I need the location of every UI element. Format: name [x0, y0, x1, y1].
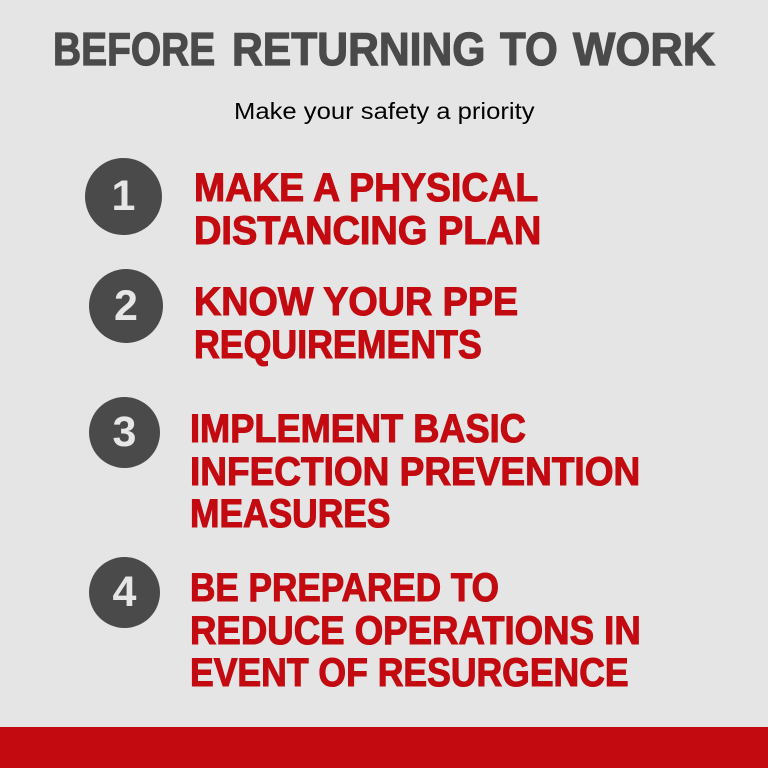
footer bar: [0, 727, 768, 768]
number badge 4: [89, 557, 160, 628]
title: RETURNING: [232, 23, 485, 75]
number badge 1: [85, 158, 162, 235]
step 4 text: [190, 566, 641, 695]
number badge 1: 1: [112, 172, 135, 220]
step 4 text: REDUCE OPERATIONS IN: [190, 608, 641, 652]
step 3 text: IMPLEMENT BASIC: [190, 407, 526, 451]
title: WORK: [573, 23, 715, 75]
step 3 text: INFECTION PREVENTION: [190, 450, 640, 494]
number badge 2: 2: [114, 282, 138, 330]
step 1 text: [194, 166, 541, 252]
title: [53, 23, 716, 75]
step 3 text: [190, 407, 640, 536]
step 4 text: EVENT OF RESURGENCE: [190, 651, 629, 695]
number badge 2: [89, 269, 163, 343]
number badge 3: [89, 397, 160, 468]
step 3 text: MEASURES: [190, 492, 390, 536]
step 2 text: KNOW YOUR PPE: [194, 280, 518, 324]
title: TO: [500, 23, 558, 75]
step 1 text: MAKE A PHYSICAL: [194, 166, 538, 210]
step 2 text: REQUIREMENTS: [194, 322, 482, 366]
step 1 text: DISTANCING PLAN: [194, 208, 541, 252]
subtitle: Make your safety a priority: [234, 98, 535, 124]
step 4 text: BE PREPARED TO: [190, 566, 499, 610]
number badge 3: 3: [113, 408, 136, 456]
title: BEFORE: [53, 23, 215, 75]
step 2 text: [194, 280, 518, 366]
number badge 4: 4: [113, 568, 136, 616]
